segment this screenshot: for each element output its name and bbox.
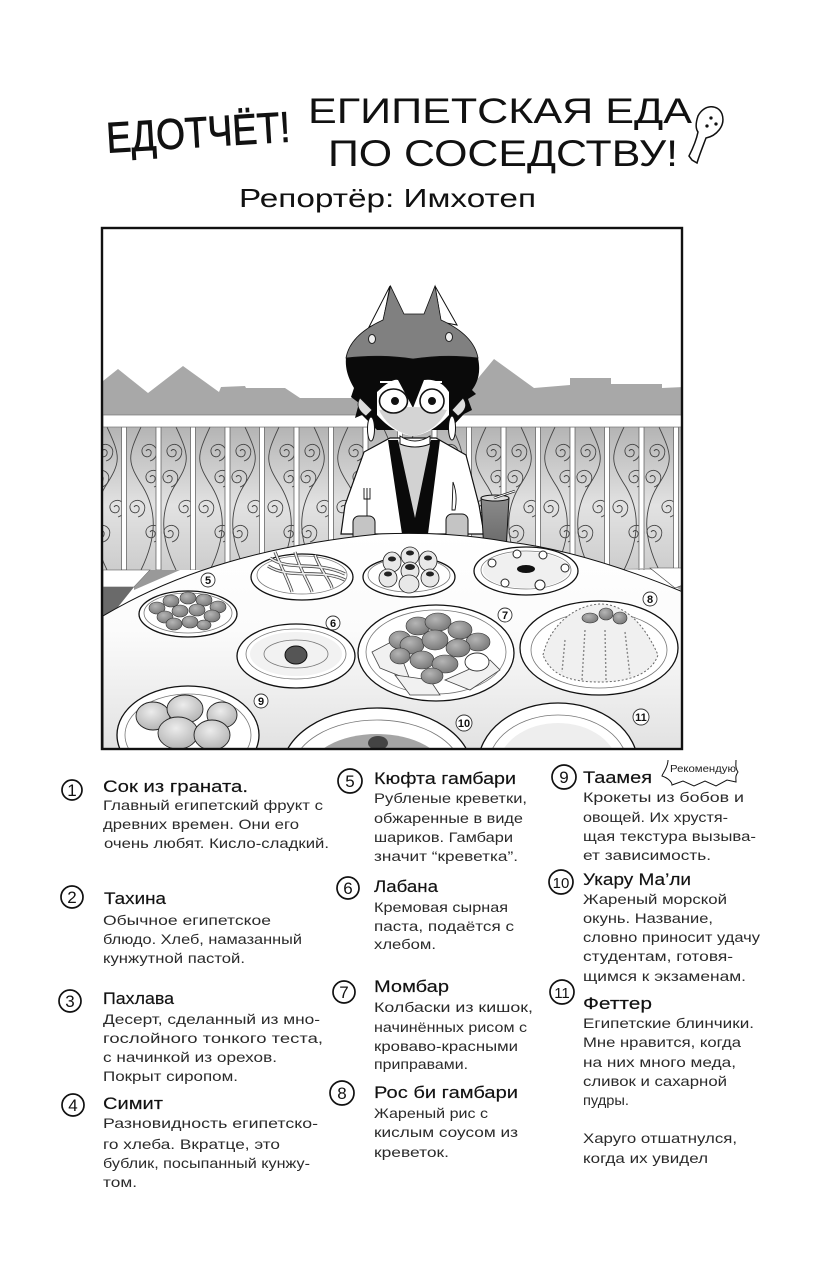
item 2: tahina xyxy=(61,886,302,966)
item 6: labana: 6 xyxy=(343,879,353,898)
fork and knife xyxy=(364,482,456,520)
item 9: taameya: 9 xyxy=(559,768,569,787)
item 5: kofta gambari: шариков. Гамбари xyxy=(374,829,513,845)
item 1: pomegranate juice: древних времен. Они его xyxy=(103,816,299,832)
item 2: tahina: кунжутной пастой. xyxy=(103,950,245,966)
plate: pakhlava xyxy=(363,547,455,597)
item 6: labana: паста, подаётся с xyxy=(374,918,514,934)
collar xyxy=(400,436,430,447)
item 5: kofta gambari: 5 xyxy=(345,772,355,791)
callout: recommended xyxy=(662,760,738,786)
callout: recommended: Рекомендую xyxy=(670,764,737,775)
dish number labels: 6 xyxy=(330,618,336,630)
ears of the hat xyxy=(369,286,457,327)
hands xyxy=(352,514,468,536)
panel frame xyxy=(102,228,682,749)
item 7: mombar: кроваво-красными xyxy=(374,1038,518,1054)
item 4: simit: 4 xyxy=(68,1096,78,1115)
item 7: mombar: Колбаски из кишок, xyxy=(374,999,533,1015)
item 3: pakhlava: с начинкой из орехов. xyxy=(103,1049,277,1065)
item 9: taameya: Крокеты из бобов и xyxy=(583,789,744,805)
plate: taameya xyxy=(116,685,260,748)
plate: ukaru ma'li xyxy=(288,707,466,748)
robe xyxy=(341,438,484,534)
character: Imhotep xyxy=(341,286,484,543)
item 9: taameya: овощей. Их хрустя- xyxy=(583,809,728,825)
item 3: pakhlava: Пахлава xyxy=(103,990,175,1008)
hat xyxy=(346,286,478,359)
plate: simit / hummus xyxy=(474,547,578,595)
item 1: pomegranate juice: очень любят. Кисло-сладкий. xyxy=(104,835,329,851)
item 9: taameya: ет зависимость. xyxy=(583,847,711,863)
item 11: fetter: Мне нравится, когда xyxy=(583,1034,741,1050)
icon: drumstick xyxy=(689,107,723,163)
reporter line: Репортёр: Имхотеп xyxy=(239,183,536,213)
plate: fetter xyxy=(480,702,636,748)
item 6: labana: Кремовая сырная xyxy=(374,899,508,915)
item 11: fetter: Египетские блинчики. xyxy=(583,1015,754,1031)
title: Египетская еда по соседству: ЕГИПЕТСКАЯ ЕДА xyxy=(308,92,693,131)
earrings xyxy=(368,416,456,441)
item 5: kofta gambari: обжаренные в виде xyxy=(374,810,523,826)
dish number labels: 10 xyxy=(458,718,470,730)
item 3: pakhlava: Десерт, сделанный из мно- xyxy=(103,1011,320,1027)
table xyxy=(103,533,683,749)
dish number labels: 8 xyxy=(647,594,653,606)
item 7: mombar: Момбар xyxy=(374,978,449,996)
dish number labels: 5 xyxy=(205,575,211,587)
item 1: pomegranate juice: Сок из граната. xyxy=(103,778,248,796)
item 4: simit: Симит xyxy=(103,1095,164,1113)
plate: kofta gambari xyxy=(139,591,237,637)
glass of pomegranate juice xyxy=(480,490,516,542)
item 1: pomegranate juice: Главный египетский фрукт с xyxy=(103,797,323,813)
item 7: mombar: 7 xyxy=(339,983,349,1002)
item 5: kofta gambari: Рубленые креветки, xyxy=(374,790,527,806)
item 8: ros bi gambari xyxy=(330,1081,518,1160)
plate: mombar xyxy=(358,605,514,701)
item 4: simit: го хлеба. Вкратце, это xyxy=(103,1136,280,1152)
pyramids and skyline xyxy=(103,359,683,415)
item 5: kofta gambari xyxy=(338,769,527,864)
plate: tahina xyxy=(251,552,353,600)
lapels xyxy=(388,440,440,534)
item 2: tahina: Обычное египетское xyxy=(103,912,271,928)
panel: manga illustration xyxy=(103,284,681,748)
plate: ros bi gambari xyxy=(520,601,678,695)
title: Египетская еда по соседству: ПО СОСЕДСТВУ! xyxy=(328,133,678,174)
item 11: fetter: на них много меда, xyxy=(583,1054,736,1070)
item 10: ukaru ma'li: щимся к экзаменам. xyxy=(583,968,746,984)
item 7: mombar: приправами. xyxy=(374,1056,468,1072)
item 2: tahina: блюдо. Хлеб, намазанный xyxy=(103,931,302,947)
item 4: simit: том. xyxy=(103,1174,137,1190)
item 8: ros bi gambari: Жареный рис с xyxy=(374,1105,488,1121)
item 10: ukaru ma'li xyxy=(549,870,760,984)
item 3: pakhlava: гослойного тонкого теста, xyxy=(103,1030,323,1046)
item 10: ukaru ma'li: Жареный морской xyxy=(583,891,727,907)
item 7: mombar xyxy=(333,978,533,1072)
dish number labels: 9 xyxy=(258,696,264,708)
item 5: kofta gambari: Кюфта гамбари xyxy=(374,770,516,788)
item 1: pomegranate juice: 1 xyxy=(67,781,77,800)
item 4: simit: бублик, посыпанный кунжу- xyxy=(103,1155,310,1171)
dish number labels: 11 xyxy=(635,712,647,724)
item 2: tahina: 2 xyxy=(67,888,77,907)
item 9: taameya: щая текстура вызыва- xyxy=(583,828,756,844)
item 10: ukaru ma'li: окунь. Название, xyxy=(583,910,713,926)
item 9: taameya: Таамея xyxy=(583,769,652,787)
title: Египетская еда по соседству xyxy=(308,92,693,174)
item 1: pomegranate juice xyxy=(62,778,329,851)
item 10: ukaru ma'li: студентам, готовя- xyxy=(583,948,733,964)
item 3: pakhlava: 3 xyxy=(65,992,75,1011)
item 8: ros bi gambari: 8 xyxy=(337,1084,347,1103)
item 11: fetter: сливок и сахарной xyxy=(583,1073,727,1089)
balcony railing xyxy=(103,415,683,570)
ear skin xyxy=(358,398,466,416)
item 11: fetter: когда их увидел xyxy=(583,1150,708,1166)
item 10: ukaru ma'li: 10 xyxy=(553,875,569,892)
item 8: ros bi gambari: кислым соусом из xyxy=(374,1124,518,1140)
item 11: fetter: Харуго отшатнулся, xyxy=(583,1130,737,1146)
dish number labels: 7 xyxy=(502,610,508,622)
face xyxy=(377,380,449,436)
item 10: ukaru ma'li: словно приносит удачу xyxy=(583,929,760,945)
item 6: labana xyxy=(337,877,514,952)
floor beyond the balcony xyxy=(103,568,683,616)
hair xyxy=(346,354,479,430)
item 4: simit: Разновидность египетско- xyxy=(103,1115,318,1131)
item 11: fetter: 11 xyxy=(554,985,570,1002)
item 5: kofta gambari: значит “креветка”. xyxy=(374,848,518,864)
item 2: tahina: Тахина xyxy=(104,890,167,908)
item 6: labana: Лабана xyxy=(374,878,439,896)
item 9: taameya xyxy=(552,765,756,863)
item 3: pakhlava: Покрыт сиропом. xyxy=(103,1068,238,1084)
item 11: fetter xyxy=(550,980,754,1166)
item 8: ros bi gambari: креветок. xyxy=(374,1144,449,1160)
item 10: ukaru ma'li: Укару Ма’ли xyxy=(583,871,691,889)
dish number labels xyxy=(201,573,657,731)
shirt xyxy=(398,442,430,518)
item 6: labana: хлебом. xyxy=(374,936,436,952)
title: Едотчёт: ЕДОТЧЁТ! xyxy=(105,104,291,163)
item 3: pakhlava xyxy=(59,990,323,1084)
item 8: ros bi gambari: Рос би гамбари xyxy=(374,1084,518,1102)
eyebrows xyxy=(380,381,442,383)
plate: labana xyxy=(237,624,355,688)
item 11: fetter: пудры. xyxy=(583,1092,629,1108)
item 4: simit xyxy=(62,1094,318,1190)
eyes xyxy=(380,389,444,413)
item 11: fetter: Феттер xyxy=(583,995,652,1013)
item 7: mombar: начинённых рисом с xyxy=(374,1019,527,1035)
